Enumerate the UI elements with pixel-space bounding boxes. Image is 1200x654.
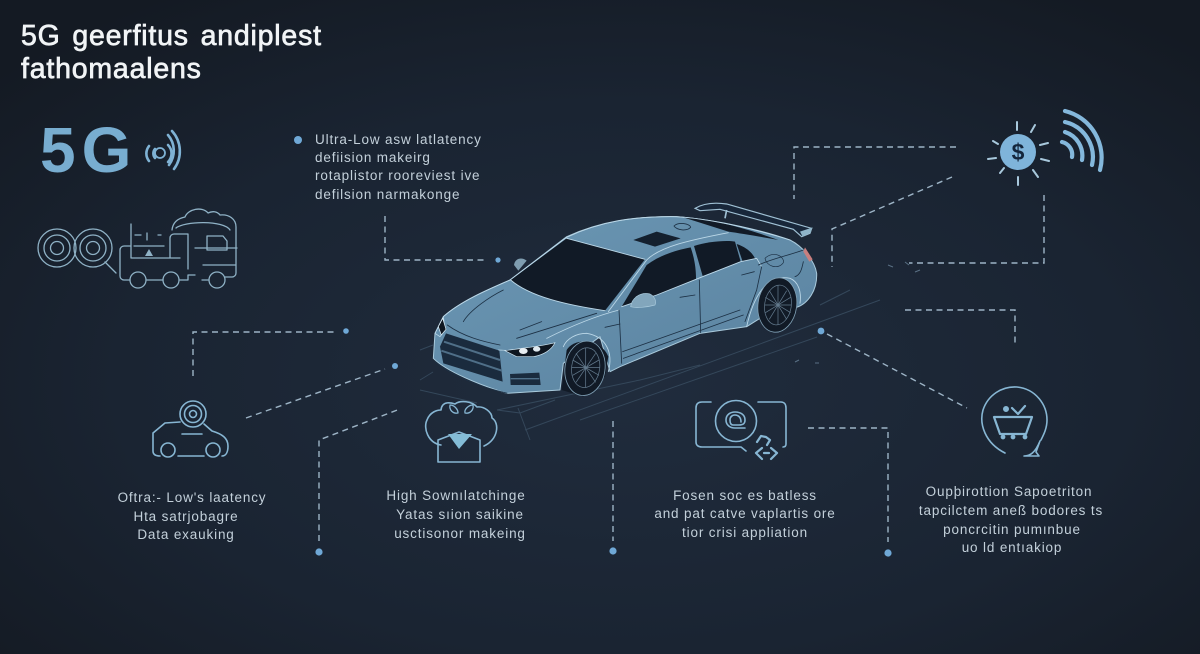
- label: right: poncrcitin pumınbue: [943, 522, 1081, 537]
- icon: dollar sun: $: [1012, 139, 1025, 165]
- connector: right elbow: [905, 310, 1015, 345]
- label: center right: Fosen soc es batless: [673, 488, 817, 503]
- icon: dollar sun: [988, 122, 1049, 185]
- text block: top: Ultra-Low asw latlatency: [315, 132, 482, 147]
- rear deck dark glass: [683, 217, 778, 240]
- connector: right bracket: [909, 195, 1044, 263]
- connector: top right: [794, 147, 956, 199]
- label: left: [118, 490, 266, 542]
- connector: left diagonal: [246, 363, 398, 418]
- icon: small triangle: [145, 249, 153, 256]
- 5G logo with signal icon: [40, 114, 180, 186]
- connector: right diagonal: [818, 328, 967, 408]
- front grille: [440, 333, 503, 382]
- label: center left: High Sownılatchinge: [386, 488, 526, 503]
- icon: wifi waves: [1062, 111, 1102, 170]
- text block: top: defiision makeirg: [315, 150, 431, 165]
- fog vent: [510, 373, 541, 385]
- headlight left: [438, 318, 446, 335]
- title: 5G geerfitus andiplest: [21, 20, 322, 52]
- roof sensor: [674, 223, 691, 230]
- connector: left upper: [193, 328, 349, 376]
- connector: lower right: [808, 428, 892, 557]
- text block: top: [294, 132, 482, 202]
- connector: top left: [385, 216, 501, 263]
- windshield: [511, 238, 645, 311]
- label: right: uo ld entıakiop: [962, 540, 1062, 555]
- connector: upper right diagonal: [832, 177, 952, 267]
- sunroof: [633, 232, 681, 247]
- label: center right: tior crisi appliation: [682, 525, 808, 540]
- connector: lower center: [609, 421, 617, 555]
- front side window: [622, 247, 696, 307]
- label: center right: and pat catve vaplartis ore: [654, 506, 836, 521]
- body shell: [433, 217, 817, 393]
- title: [21, 20, 322, 85]
- label: center left: usctisonor makeing: [394, 526, 526, 541]
- label: left: Oftra:- Low's laatency: [118, 490, 266, 505]
- headlight right: [505, 343, 555, 357]
- rear wheel: [754, 275, 800, 335]
- icon: at sign message: [696, 400, 786, 459]
- text block: top: defilsion narmakonge: [315, 187, 460, 202]
- text block: top: rotaplistor rooreviest ive: [315, 168, 480, 183]
- door lines and panel lines: [447, 250, 803, 363]
- label: center left: Yatas sıion saikine: [396, 507, 524, 522]
- label: right: tapcilctem aneß bodores ts: [919, 503, 1103, 518]
- bumper lip: [435, 362, 507, 393]
- mirror left: [514, 259, 527, 271]
- label: right: Oupþirottion Sapoetriton: [926, 484, 1092, 499]
- label: center right: [654, 488, 836, 540]
- icon: car with gauge: [153, 401, 228, 457]
- icon: cloud envelope: [426, 402, 497, 462]
- icon: shopping basket: [982, 387, 1047, 456]
- label: left: Hta satrjobagre: [133, 509, 239, 524]
- floor grid under car: [420, 262, 920, 440]
- connector: lower left: [315, 409, 400, 556]
- spoiler: [695, 203, 813, 237]
- tail light: [803, 247, 813, 262]
- car: [433, 203, 817, 398]
- front wheel: [561, 338, 609, 398]
- rear side windows: [694, 241, 741, 276]
- mirror right: [631, 294, 656, 307]
- title: fathomaalens: [21, 53, 202, 85]
- label: center left: [386, 488, 526, 541]
- label: left: Data exauking: [137, 527, 235, 542]
- icon: rings and vehicles: [38, 209, 237, 288]
- label: right: [919, 484, 1103, 555]
- 5G logo with signal icon: 5G: [40, 114, 137, 186]
- car edge highlights: [435, 217, 800, 372]
